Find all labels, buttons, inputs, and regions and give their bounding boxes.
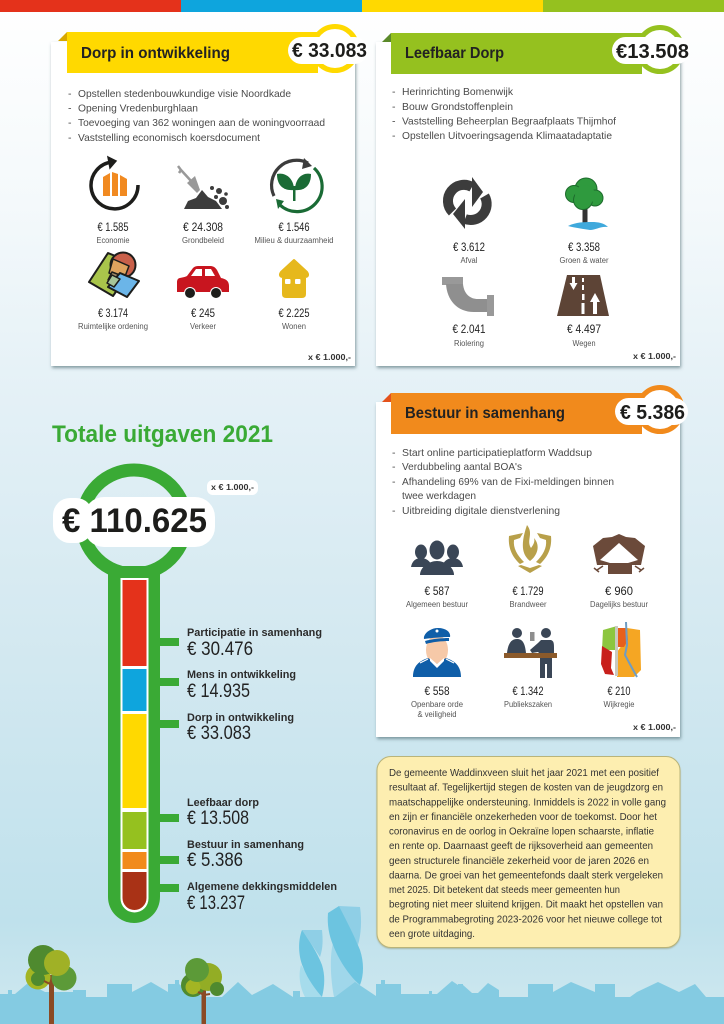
text block: toelichting: en zijn er financiële onzekerheden voor de toekomst. Door het xyxy=(389,812,657,823)
bullet list: Opening Vredenburghlaan xyxy=(78,102,198,114)
value: dagelijks bestuur xyxy=(590,586,648,609)
value: afval xyxy=(453,242,485,265)
text block: toelichting: en rente op. Daarnaast geeft de rijksoverheid aan gemeenten xyxy=(389,841,653,852)
value: riolering xyxy=(452,324,486,348)
value: verkeer: € 245 xyxy=(191,308,215,320)
segment: dorp xyxy=(122,714,146,808)
value: milieu xyxy=(254,222,334,245)
unit note xyxy=(207,480,258,495)
bullet list: Uitbreiding digitale dienstverlening xyxy=(402,505,560,517)
value: wijkregie xyxy=(604,686,635,709)
label: bestuur: Bestuur in samenhang xyxy=(187,839,304,851)
value: publiekszaken: € 1.342 xyxy=(512,686,544,698)
value: dagelijks bestuur: Dagelijks bestuur xyxy=(590,600,648,609)
value: wegen: Wegen xyxy=(572,339,596,348)
segment: participatie xyxy=(122,580,146,666)
value: wegen xyxy=(567,324,601,348)
bullet list: - xyxy=(392,86,396,98)
value: wonen: Wonen xyxy=(282,322,306,331)
icon: publiekszaken xyxy=(504,628,557,678)
value: brandweer xyxy=(510,586,547,609)
heading banner: € 5.386 xyxy=(620,402,685,424)
value: milieu: Milieu & duurzaamheid xyxy=(254,236,334,245)
panel: Leefbaar Dorp xyxy=(376,28,690,366)
icon: milieu en duurzaamheid xyxy=(272,158,322,212)
segment: leefbaar xyxy=(122,812,146,849)
value: grondbeleid xyxy=(182,222,224,245)
text block: toelichting: maatschappelijke ondersteuning. Inmiddels is 2022 in volle gang xyxy=(389,797,666,808)
value: wegen: € 4.497 xyxy=(567,324,601,336)
value: groen en water: € 3.358 xyxy=(568,242,600,254)
heading banner: Dorp in ontwikkeling xyxy=(81,45,230,62)
value: verkeer: Verkeer xyxy=(190,322,216,331)
value: wonen xyxy=(278,308,310,331)
panel: Bestuur in samenhang xyxy=(376,388,688,737)
value: openbare orde: € 558 xyxy=(424,686,450,698)
bullet list: Opstellen stedenbouwkundige visie Noordkade xyxy=(78,88,291,100)
bullet list: Vaststelling Beheerplan Begraafplaats Thijmhof xyxy=(402,116,616,128)
icon: wijkregie xyxy=(601,622,641,677)
icon: wonen xyxy=(280,260,308,297)
bullet list xyxy=(68,88,325,144)
top colour bar xyxy=(0,0,724,12)
illustration: tree right xyxy=(181,958,224,1024)
value: algemeen bestuur xyxy=(406,586,468,609)
bullet list: - xyxy=(68,102,72,114)
label: algemene dekkingsmiddelen: Algemene dekkingsmiddelen xyxy=(187,881,337,893)
illustration: twisted towers xyxy=(299,906,363,997)
text block: toelichting: De gemeente Waddinxveen sluit het jaar 2021 met een positief xyxy=(389,768,659,779)
total amount callout: € 110.625 xyxy=(62,502,207,540)
panel: Dorp in ontwikkeling xyxy=(51,26,368,366)
heading banner: €13.508 xyxy=(616,41,689,63)
label: mens xyxy=(187,669,296,702)
icon: brandweer xyxy=(509,525,551,573)
icon: groen en water xyxy=(566,178,608,230)
label: dorp xyxy=(187,712,294,744)
bullet list: - xyxy=(392,461,396,473)
label: leefbaar xyxy=(187,797,259,829)
bullet list: Opstellen Uitvoeringsagenda Klimaatadaptatie xyxy=(402,130,612,142)
value: groen en water: Groen & water xyxy=(560,256,609,265)
bullet list xyxy=(392,447,614,517)
icon: economie xyxy=(91,157,138,209)
bullet list: - xyxy=(392,130,396,142)
text block: toelichting: daarna. De groei van het gemeentefonds daalt sterk vergeleken xyxy=(389,870,663,881)
value: riolering: € 2.041 xyxy=(452,324,486,336)
heading: Totale uitgaven 2021: Totale uitgaven 2021 xyxy=(52,421,273,448)
value: afval: Afval xyxy=(460,256,478,265)
heading banner: Bestuur in samenhang xyxy=(405,405,565,422)
value: ruimtelijke ordening: € 3.174 xyxy=(98,308,128,320)
value: grondbeleid: Grondbeleid xyxy=(182,236,224,245)
value: openbare orde: & veiligheid xyxy=(418,710,456,719)
text block: toelichting xyxy=(377,756,680,948)
heading banner xyxy=(382,28,690,74)
unit note: x € 1.000,- xyxy=(633,722,676,732)
illustration: tree left xyxy=(26,945,76,1024)
label: participatie xyxy=(187,627,322,660)
text block: toelichting: begroting niet meer sluitend krijgen. Dit maakt het opstellen van xyxy=(389,900,663,911)
value: algemeen bestuur: € 587 xyxy=(424,586,450,598)
text block: toelichting: coronavirus en de oorlog in Oekraïne lopen schaarste, inflatie xyxy=(389,826,654,838)
bullet list: - xyxy=(392,116,396,128)
icon: riolering xyxy=(442,277,494,316)
label: bestuur xyxy=(187,839,304,871)
label: leefbaar: Leefbaar dorp xyxy=(187,797,259,809)
label: leefbaar: € 13.508 xyxy=(187,808,249,829)
bullet list: - xyxy=(392,447,396,459)
value: algemeen bestuur: Algemeen bestuur xyxy=(406,600,468,609)
icon: afval xyxy=(448,177,487,229)
unit note: x € 1.000,- xyxy=(633,351,676,361)
value: wonen: € 2.225 xyxy=(278,308,310,320)
heading banner xyxy=(58,26,368,73)
unit note: x € 1.000,- xyxy=(308,352,351,362)
icon: grondbeleid xyxy=(178,166,229,209)
value: economie: € 1.585 xyxy=(98,222,128,234)
icon: wegen xyxy=(557,275,609,316)
bullet list: Afhandeling 69% van de Fixi-meldingen binnen xyxy=(402,476,614,488)
value: wijkregie: € 210 xyxy=(608,686,630,698)
bullet list: Bouw Grondstoffenplein xyxy=(402,101,513,113)
unit note: x € 1.000,- xyxy=(211,482,254,492)
value: riolering: Riolering xyxy=(454,339,484,348)
heading banner: € 33.083 xyxy=(292,40,367,62)
label: dorp: Dorp in ontwikkeling xyxy=(187,712,294,724)
text block: toelichting: de Programmabegroting 2023-2026 voor het nieuwe college tot xyxy=(389,914,662,925)
label: participatie: Participatie in samenhang xyxy=(187,627,322,639)
value: economie: Economie xyxy=(96,236,130,245)
illustration: skyline xyxy=(0,980,724,1024)
value: ruimtelijke ordening: Ruimtelijke ordening xyxy=(78,322,148,331)
bullet list: - xyxy=(68,117,72,129)
segment: bestuur xyxy=(122,852,146,869)
bullet list: - xyxy=(68,88,72,100)
text block: toelichting: resultaat af. Tegelijkertijd stegen de kosten van de jeugdzorg en xyxy=(389,783,663,794)
text block: toelichting: een grote uitdaging. xyxy=(389,929,475,940)
bullet list: - xyxy=(68,132,72,144)
icon: algemeen bestuur xyxy=(411,540,463,575)
segment: algemene dekkingsmiddelen xyxy=(122,872,146,910)
value: publiekszaken: Publiekszaken xyxy=(504,700,552,709)
icon: dagelijks bestuur xyxy=(593,534,645,574)
value: verkeer xyxy=(190,308,216,331)
bullet list: Herinrichting Bomenwijk xyxy=(402,86,514,98)
label: bestuur: € 5.386 xyxy=(187,850,243,871)
text block: toelichting: met 2025. Dit betekent dat steeds meer gemeenten hun xyxy=(389,885,620,896)
bullet list: Vaststelling economisch koersdocument xyxy=(78,132,260,144)
value: openbare orde xyxy=(411,686,464,719)
chart: thermometer xyxy=(82,470,186,923)
heading banner xyxy=(382,388,688,434)
tick marks xyxy=(159,638,179,892)
value: economie xyxy=(96,222,130,245)
value: openbare orde: Openbare orde xyxy=(411,700,464,709)
value: brandweer: € 1.729 xyxy=(512,586,544,598)
icon: openbare orde xyxy=(413,628,461,677)
bullet list: twee werkdagen xyxy=(402,490,476,502)
value: dagelijks bestuur: € 960 xyxy=(605,586,633,598)
value: brandweer: Brandweer xyxy=(510,600,547,609)
value: groen en water xyxy=(560,242,609,265)
label: algemene dekkingsmiddelen xyxy=(187,881,337,914)
value: afval: € 3.612 xyxy=(453,242,485,254)
heading banner: Leefbaar Dorp xyxy=(405,45,504,62)
bullet list: Start online participatieplatform Waddsup xyxy=(402,447,592,459)
value: publiekszaken xyxy=(504,686,552,709)
bullet list: - xyxy=(392,101,396,113)
label: mens: Mens in ontwikkeling xyxy=(187,669,296,681)
icon: ruimtelijke ordening xyxy=(89,252,139,297)
bullet list: - xyxy=(392,505,396,517)
label: dorp: € 33.083 xyxy=(187,723,251,744)
value: grondbeleid: € 24.308 xyxy=(183,222,223,234)
bullet list: Verdubbeling aantal BOA's xyxy=(402,461,522,473)
value: wijkregie: Wijkregie xyxy=(604,700,635,709)
segment: mens xyxy=(122,669,146,711)
value: ruimtelijke ordening xyxy=(78,308,148,331)
label: participatie: € 30.476 xyxy=(187,639,253,660)
icon: verkeer xyxy=(177,266,229,299)
bullet list xyxy=(392,86,616,142)
label: algemene dekkingsmiddelen: € 13.237 xyxy=(187,893,245,914)
text block: toelichting: geen structurele financiële zekerheid voor de jaren 2026 en xyxy=(389,856,649,867)
bullet list: Toevoeging van 362 woningen aan de woningvoorraad xyxy=(78,117,325,129)
value: milieu: € 1.546 xyxy=(278,222,310,234)
label: mens: € 14.935 xyxy=(187,681,250,702)
bullet list: - xyxy=(392,476,396,488)
